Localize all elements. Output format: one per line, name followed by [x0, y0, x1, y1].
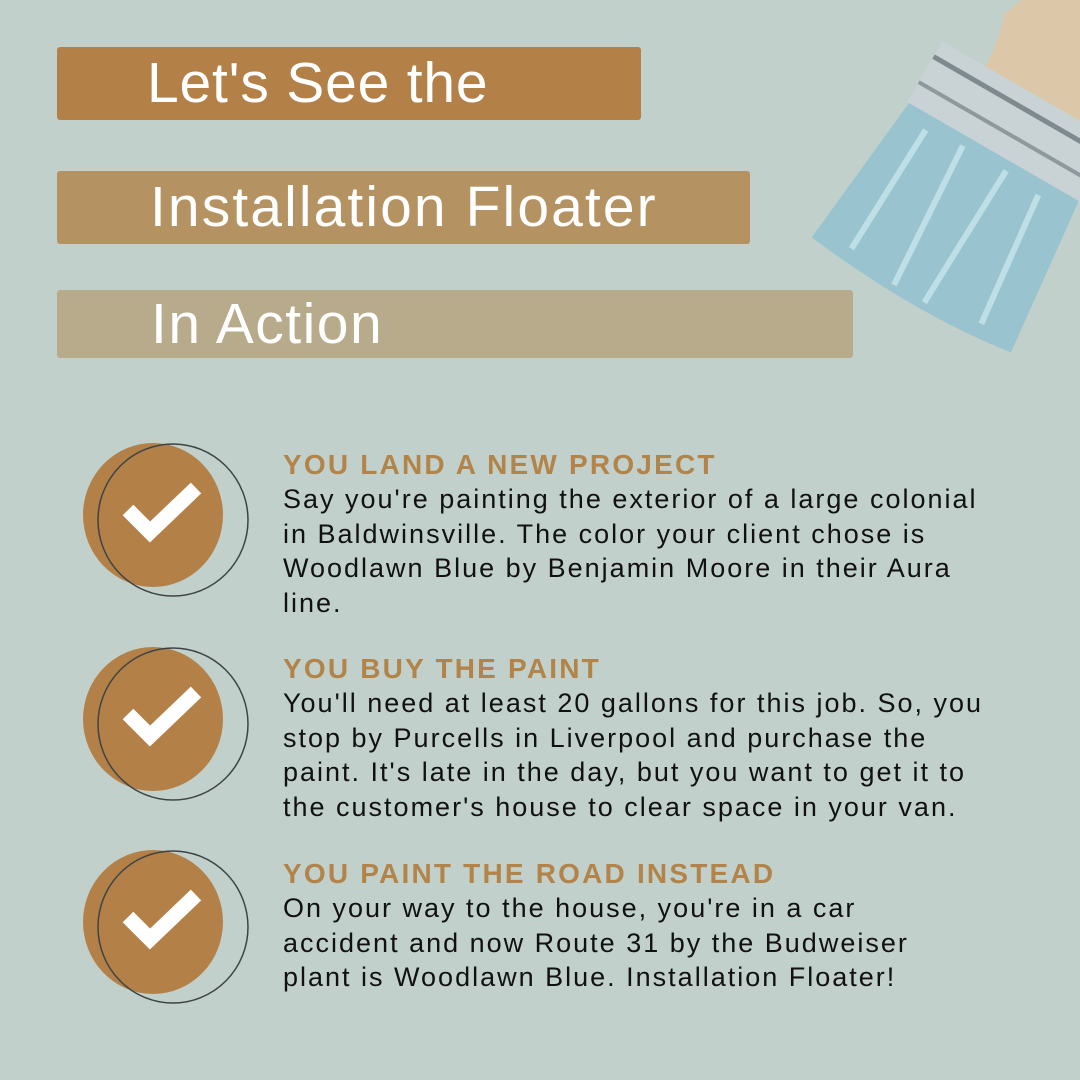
item 2: the customer's house to clear space in your van.: [283, 792, 957, 822]
icon: check 1: [83, 443, 249, 597]
title bar 2: Installation Floater: [150, 175, 658, 239]
item 1: line.: [283, 588, 343, 618]
icon: paintbrush: [812, 0, 1080, 352]
item 3: [283, 858, 909, 992]
item 1: Woodlawn Blue by Benjamin Moore in their Aura: [283, 553, 952, 583]
item 3: On your way to the house, you're in a car: [283, 893, 856, 923]
item 1: YOU LAND A NEW PROJECT: [283, 449, 717, 480]
item 3: plant is Woodlawn Blue. Installation Floater!: [283, 962, 896, 992]
title bar 2: [57, 171, 750, 244]
item 1: [283, 449, 978, 618]
item 3: YOU PAINT THE ROAD INSTEAD: [283, 858, 775, 889]
title bar 1: Let's See the: [147, 51, 488, 115]
icon: check 2: [83, 647, 249, 801]
item 2: YOU BUY THE PAINT: [283, 653, 601, 684]
title bar 3: In Action: [151, 292, 383, 356]
item 2: You'll need at least 20 gallons for this job. So, you: [283, 688, 983, 718]
item 3: accident and now Route 31 by the Budweiser: [283, 928, 909, 958]
title bar 3: [57, 290, 853, 358]
item 1: in Baldwinsville. The color your client chose is: [283, 518, 926, 548]
title bar 1: [57, 47, 641, 120]
icon: check 3: [83, 850, 249, 1004]
item 2: [283, 653, 983, 822]
item 2: paint. It's late in the day, but you want to get it to: [283, 757, 966, 787]
item 1: Say you're painting the exterior of a large colonial: [283, 484, 978, 514]
item 2: stop by Purcells in Liverpool and purchase the: [283, 722, 927, 752]
